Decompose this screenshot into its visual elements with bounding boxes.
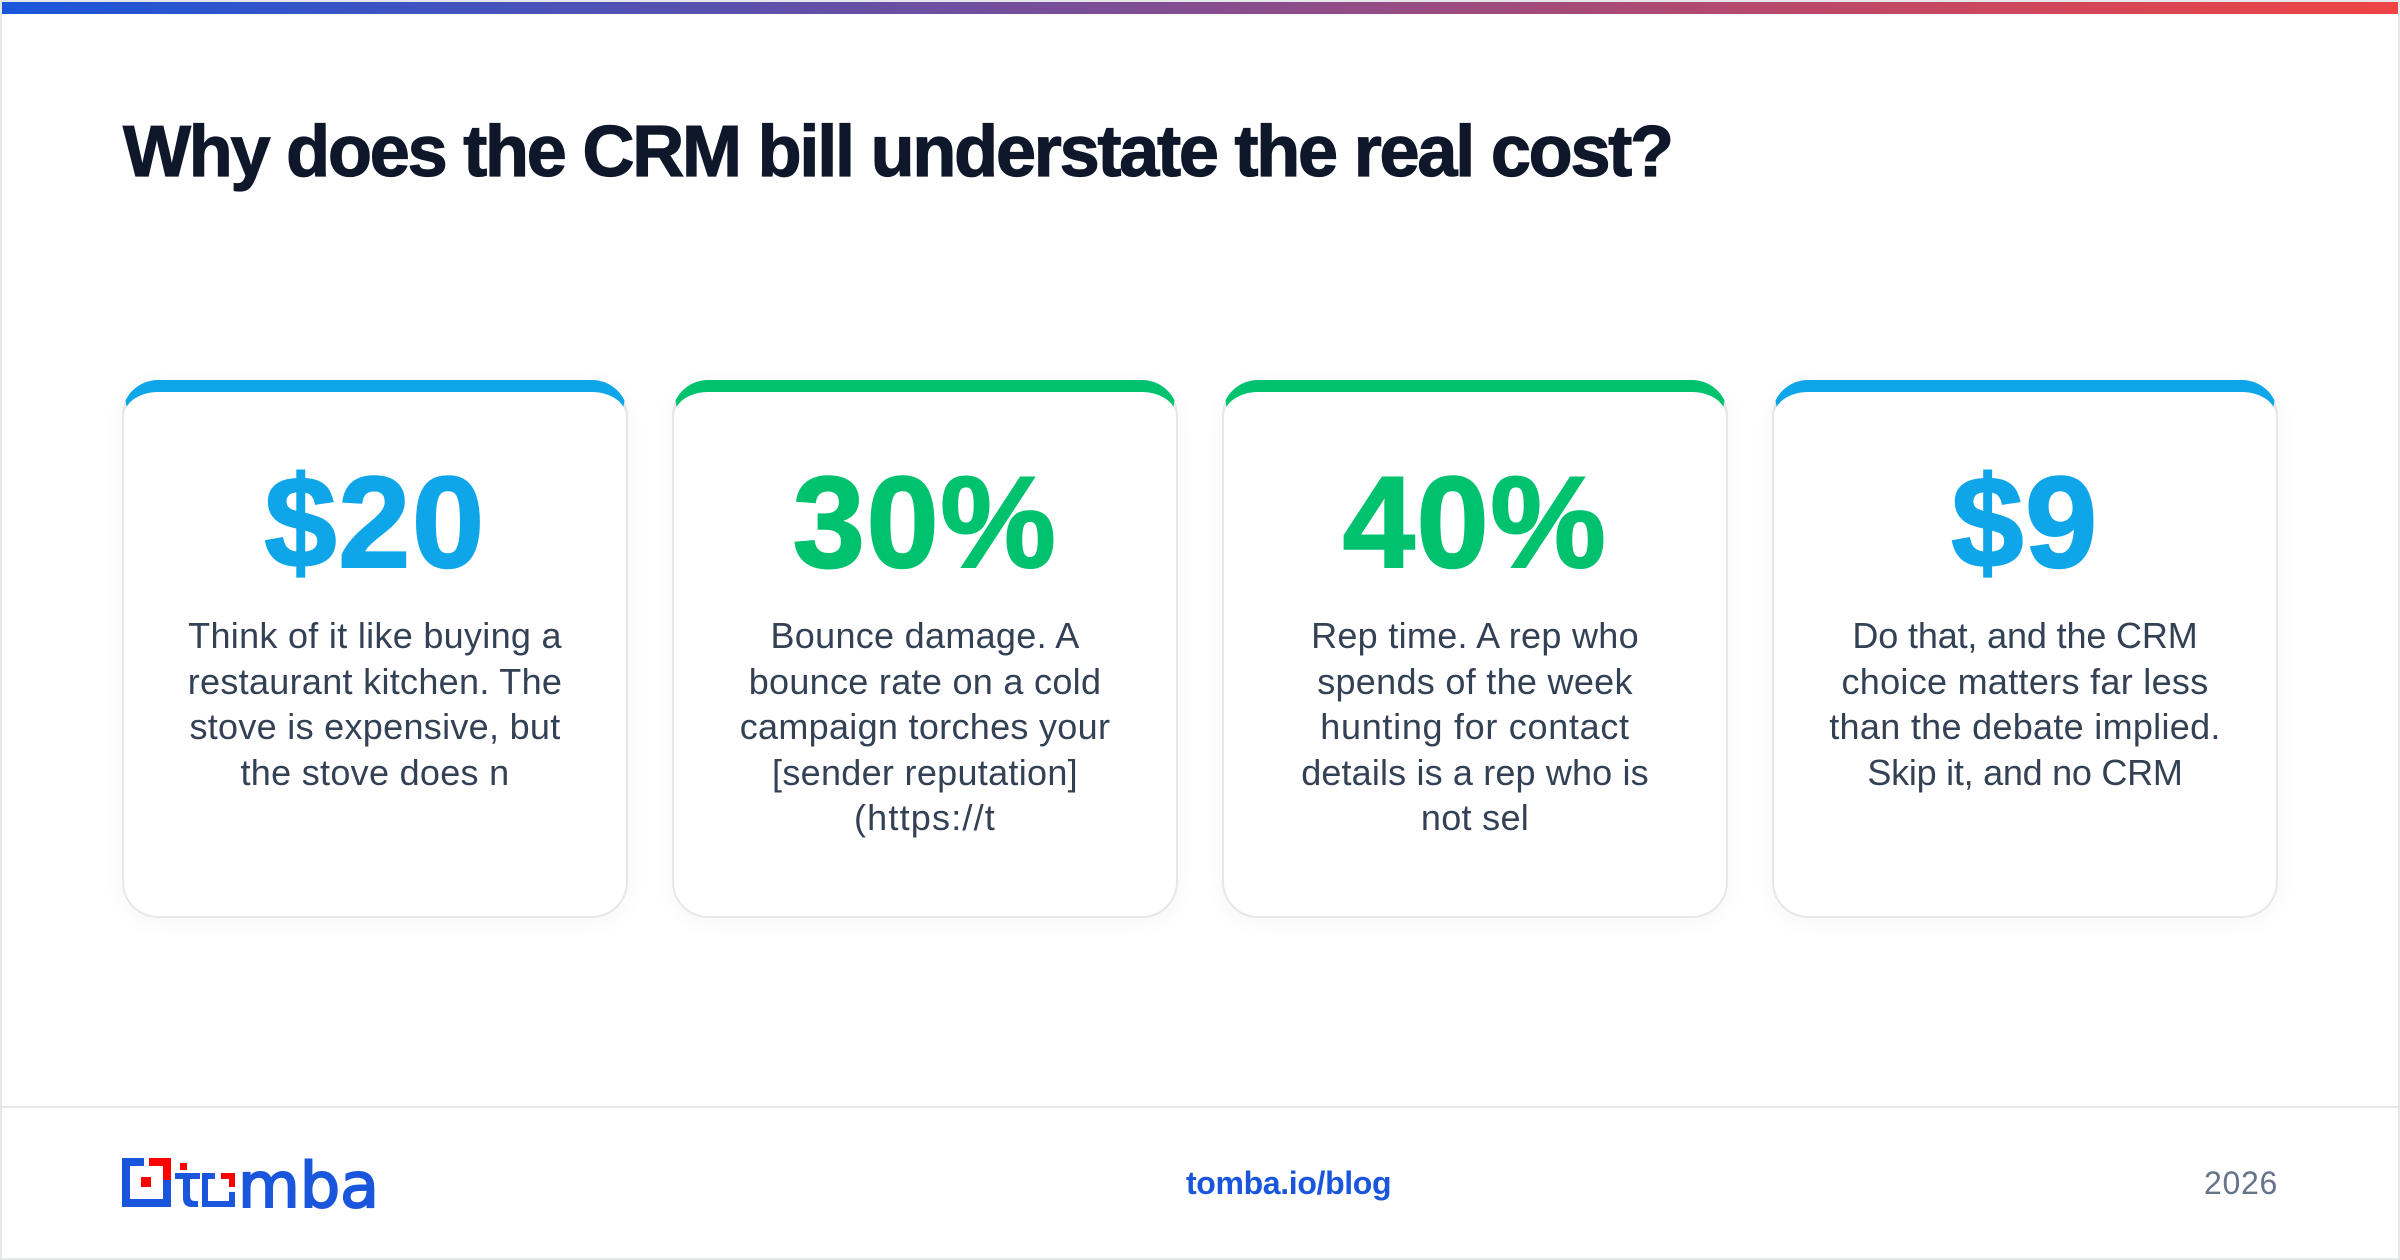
text: rep time: not sel (1421, 797, 1529, 838)
stat: 30%: 30% (793, 449, 1057, 595)
text: bounce damage: (https://t (854, 797, 996, 838)
text: CRM choice: choice matters far less (1841, 660, 2209, 702)
text: kitchen analogy: restaurant kitchen. The (188, 660, 562, 702)
icon: tomba logo (122, 1150, 379, 1210)
text: kitchen analogy: the stove does n (240, 752, 509, 792)
text: bounce damage (740, 615, 1110, 838)
panel: 30% stat card (672, 380, 1178, 918)
text: kitchen analogy: stove is expensive, but (189, 706, 561, 747)
text: rep time: details is a rep who is (1301, 752, 1649, 792)
text: CRM choice (1829, 615, 2221, 792)
text: bounce damage: Bounce damage. A (770, 615, 1080, 656)
text: rep time: Rep time. A rep who (1311, 615, 1639, 656)
text: kitchen analogy: Think of it like buying a (188, 615, 562, 656)
text: CRM choice: Do that, and the CRM (1852, 615, 2198, 656)
text: kitchen analogy (188, 615, 562, 792)
text: CRM choice: Skip it, and no CRM (1867, 752, 2183, 792)
stat: 40%: 40% (1343, 449, 1607, 595)
text: bounce damage: [sender reputation] (772, 752, 1078, 792)
text: bounce damage: campaign torches your (740, 706, 1110, 747)
text: CRM choice: than the debate implied. (1829, 706, 2221, 747)
stat: $20: $20 (264, 449, 486, 595)
text: rep time (1301, 615, 1649, 838)
text: rep time: spends of the week (1317, 660, 1633, 702)
panel: 40% stat card (1222, 380, 1728, 918)
text: bounce damage: bounce rate on a cold (749, 660, 1101, 702)
panel: $9 stat card (1772, 380, 2278, 918)
text: rep time: hunting for contact (1320, 706, 1630, 747)
stat: $9: $9 (1951, 449, 2099, 595)
title: Why does the CRM bill understate the real cost? (123, 112, 1672, 192)
footer link: tomba.io/blog (1186, 1165, 1391, 1201)
panel: $20 stat card (122, 380, 628, 918)
footer year: 2026 (2204, 1165, 2278, 1201)
